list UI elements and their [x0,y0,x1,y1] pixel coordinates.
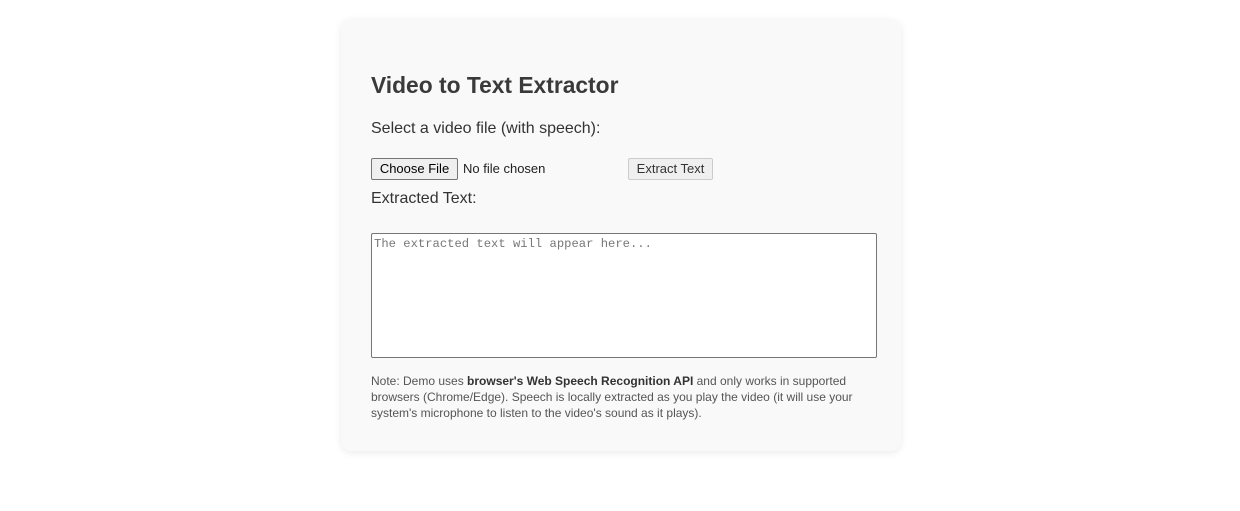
label: select video: Select a video file (with speech): [371,120,600,137]
textarea: The extracted text will appear here... [374,237,652,251]
label: extracted text: Extracted Text: [371,190,477,207]
button: extract text [628,158,713,180]
button: choose file: Choose File [380,161,449,176]
file input [371,158,545,180]
button: choose file [371,158,458,180]
title: Video to Text Extractor [371,72,618,98]
note text: Note: Demo uses browser's Web Speech Recognition API and only works in supported browsers (Chrome/Edge). Speech is locally extracted as you play the video (it will use your system's microphone to listen to the video's sound as it plays). [371,374,853,420]
panel: card [341,19,901,451]
textarea [371,233,877,358]
file input: No file chosen [463,161,545,176]
button: extract text: Extract Text [637,161,704,176]
